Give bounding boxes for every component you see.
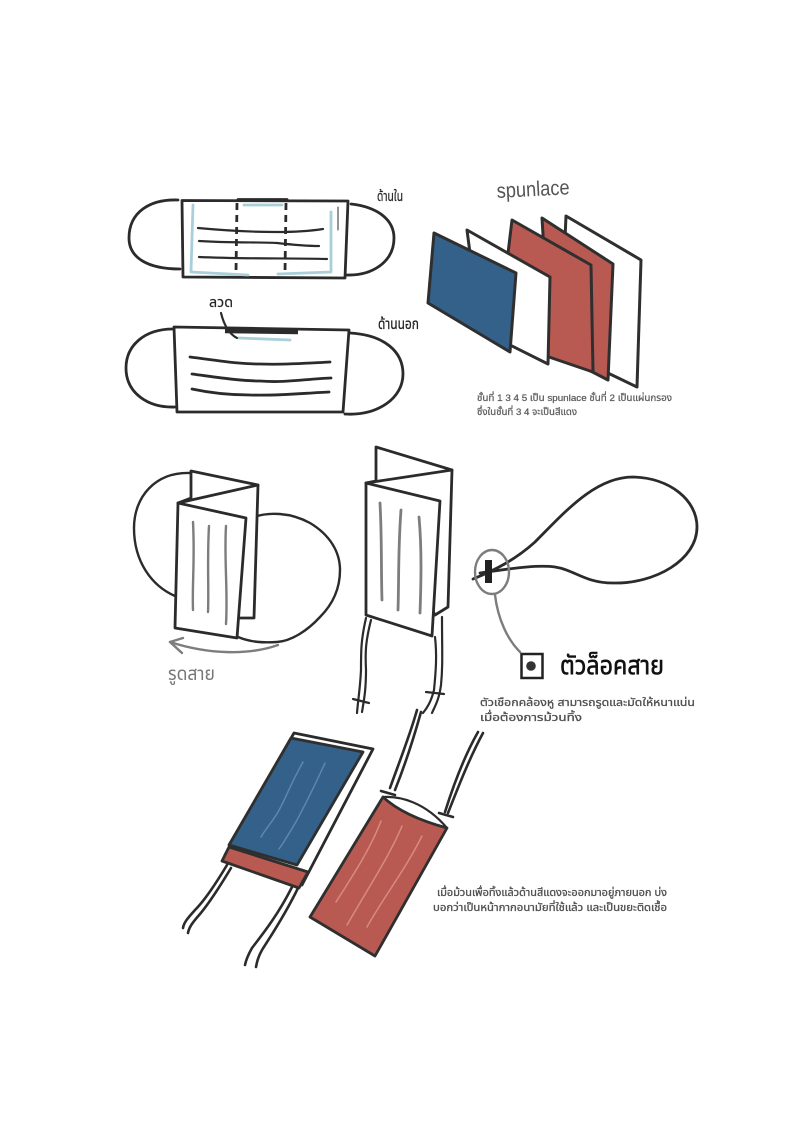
label: inside: ด้านใน — [377, 188, 403, 204]
front panel — [366, 483, 440, 636]
toggle icon — [522, 654, 542, 678]
leader line — [495, 595, 520, 652]
layers caption — [477, 391, 672, 418]
roll body — [310, 797, 447, 956]
layer 1 blue — [428, 233, 516, 352]
strings blue mask — [183, 865, 298, 967]
mask body inside — [182, 200, 348, 278]
layer 5 white — [560, 216, 641, 387]
mask body outside — [174, 327, 349, 412]
pleats folded — [193, 522, 227, 624]
front panel folded — [175, 503, 246, 638]
pointer line — [221, 313, 237, 338]
toggle — [485, 560, 492, 583]
light blue seams — [191, 205, 331, 275]
label: wire: ลวด — [209, 294, 233, 310]
outer panel — [225, 733, 373, 885]
pleat lines outside — [190, 357, 331, 395]
ear loops outside mask — [126, 329, 403, 414]
pull arrow — [170, 638, 278, 653]
roll caption: เมื่อม้วนเพื่อทิ้งแล้วด้านสีแดงจะออกมาอยู่ภายนอก บ่ง — [437, 885, 667, 899]
roll caption: บอกว่าเป็นหน้ากากอนามัยที่ใช้แล้ว และเป็นขยะติดเชื้อ — [433, 900, 667, 914]
pleats on blue — [261, 762, 325, 849]
blue face — [229, 738, 363, 865]
mask outside view — [126, 313, 403, 414]
toggle heading: ตัวล็อคสาย — [560, 650, 664, 680]
pleat lines inside — [198, 207, 338, 259]
mask inside view — [129, 200, 394, 278]
folded mask with loops — [134, 471, 340, 642]
strings — [353, 617, 444, 713]
nose wire outside — [225, 331, 298, 332]
pleats — [380, 503, 421, 613]
rolled mask red side — [310, 710, 483, 956]
ear loops inside mask — [129, 200, 394, 275]
toggle caption: เมื่อต้องการม้วนทิ้ง — [480, 709, 582, 724]
layer 2 white — [467, 230, 550, 364]
layers caption: ซึ่งในชั้นที่ 3 4 จะเป็นสีแดง — [477, 405, 577, 418]
seam outside — [239, 338, 290, 340]
ridge — [366, 470, 452, 483]
red band — [222, 847, 308, 888]
pleats on red — [336, 821, 422, 927]
cord loop — [473, 477, 697, 583]
fold dashes — [236, 203, 286, 272]
ear loops folded — [134, 473, 340, 642]
highlight circle — [475, 550, 509, 594]
fold ridge — [178, 485, 258, 503]
toggle caption — [480, 696, 695, 724]
label: pull strap: รูดสาย — [168, 664, 215, 686]
roll opening — [383, 797, 447, 828]
toggle caption: ตัวเชือกคล้องหู สามารถรูดและมัดให้หนาแน่น — [480, 696, 695, 709]
layer 4 red — [542, 218, 613, 380]
roll caption — [433, 885, 667, 914]
layers caption: ชั้นที่ 1 3 4 5 เป็น spunlace ชั้นที่ 2 เป็นแผ่นกรอง — [477, 391, 672, 404]
label: outside: ด้านนอก — [378, 316, 419, 333]
strings red mask — [381, 710, 483, 817]
spunlace heading: spunlace — [496, 176, 570, 203]
back panel folded — [178, 471, 258, 618]
layer 3 red — [500, 220, 593, 372]
layer diagram — [428, 216, 641, 387]
folded mask with strings — [353, 447, 452, 713]
rolled mask blue side — [183, 733, 373, 967]
back panel — [366, 447, 452, 615]
nose wire — [238, 198, 287, 201]
toggle loop — [473, 477, 697, 652]
